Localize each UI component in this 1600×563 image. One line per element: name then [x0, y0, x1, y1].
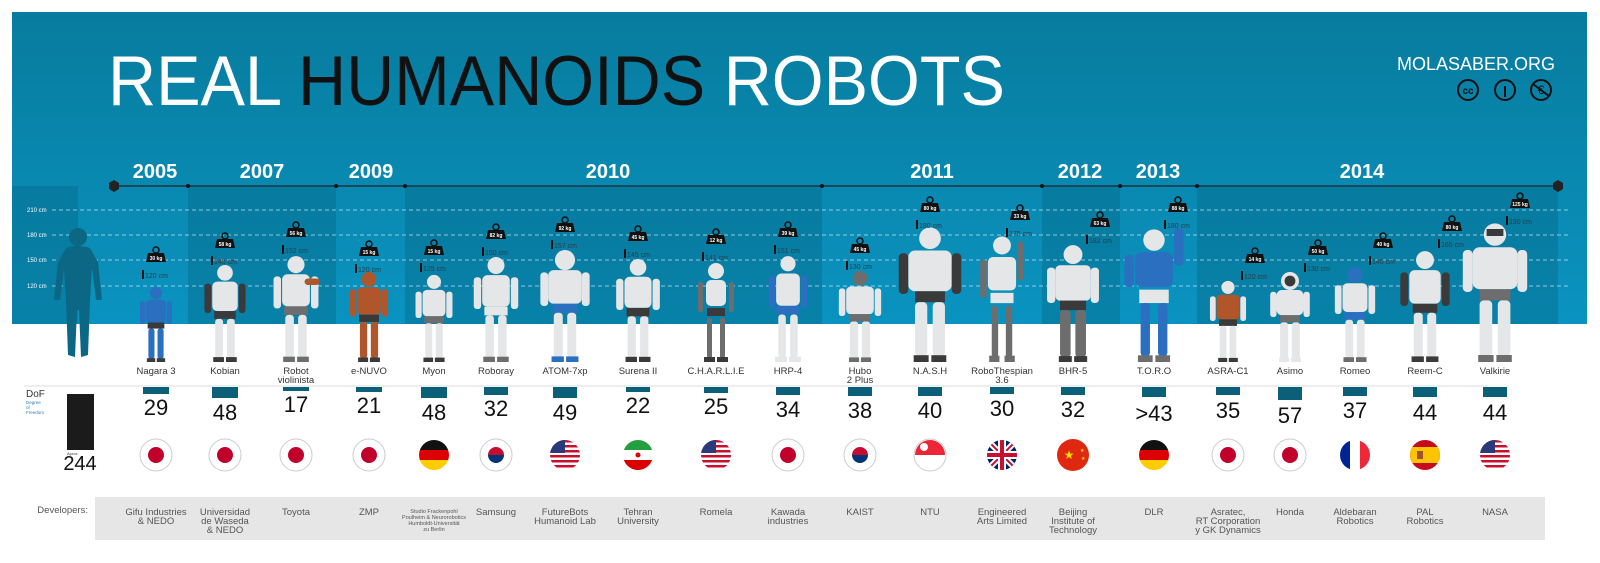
developer names: Samsung: [476, 507, 516, 518]
DoF numbers: 48: [213, 400, 237, 425]
human silhouette: [54, 228, 102, 357]
height scale: 210 cm: [27, 208, 47, 214]
flag: France: [1340, 440, 1370, 470]
developer names: Studio Frackenpohl: [410, 509, 458, 515]
robot: Kobian: [204, 265, 246, 362]
DoF numbers: 22: [626, 393, 650, 418]
robot: Robot violinista: [274, 256, 320, 362]
robot names: violinista: [278, 375, 315, 386]
weight and height markers: 165 cm: [1441, 242, 1464, 249]
flag: Japan: [353, 439, 385, 471]
developer names: FutureBots: [542, 507, 588, 518]
robot: Reem-C: [1400, 251, 1450, 362]
weight and height markers: 125 kg: [1512, 202, 1528, 208]
flag: Korea: [480, 439, 512, 471]
DoF numbers: >43: [1135, 401, 1173, 426]
weight and height markers: 15 kg: [363, 250, 375, 256]
DoF numbers: 40: [918, 398, 942, 423]
year labels: [133, 161, 1385, 183]
developer names: Toyota: [282, 507, 311, 518]
weight and height markers: 157 cm: [554, 243, 577, 250]
DoF numbers: 21: [357, 393, 381, 418]
DoF numbers: 32: [484, 396, 508, 421]
robot names: e-NUVO: [351, 366, 387, 377]
weight and height markers: 180 cm: [919, 223, 942, 230]
weight and height markers: 151 cm: [777, 248, 800, 255]
flag: USA: [550, 440, 580, 468]
flag: USA: [701, 440, 731, 468]
DoF numbers: [144, 392, 1507, 428]
weight and height markers: 14 kg: [1249, 257, 1261, 263]
weight and height markers: 45 kg: [632, 235, 644, 241]
license icons: [1458, 80, 1551, 100]
flag: Germany: [419, 440, 449, 470]
DoF numbers: 17: [284, 392, 308, 417]
year labels: 2012: [1058, 161, 1102, 183]
robot names: Kobian: [210, 366, 240, 377]
height scale: 120 cm: [27, 284, 47, 290]
robot names: [136, 366, 1510, 386]
weight and height markers: 152 cm: [285, 248, 308, 255]
flag: China: ★: [1064, 448, 1074, 462]
year labels: 2009: [349, 161, 393, 183]
weight and height markers: 45 kg: [854, 247, 866, 253]
developers band: [95, 497, 1545, 540]
year labels: 2007: [240, 161, 284, 183]
height scale: [27, 208, 1568, 290]
developer names: Humboldt-Universität: [408, 521, 460, 527]
developer names: Humanoid Lab: [534, 516, 596, 527]
site name: MOLASABER.ORG: [1397, 54, 1555, 74]
robot names: Hubo: [849, 366, 871, 377]
developer names: de Waseda: [201, 516, 250, 527]
developer names: Universidad: [200, 507, 250, 518]
human DoF bar: 244: [63, 453, 97, 475]
license icons: €: [1538, 83, 1545, 97]
developer names: Tehran: [623, 507, 653, 518]
robot names: BHR-5: [1059, 366, 1087, 377]
robot names: ATOM-7xp: [542, 366, 588, 377]
robot names: Myon: [422, 366, 446, 377]
robot: ATOM-7xp: [540, 250, 590, 362]
DoF legend: Degree: [26, 400, 41, 405]
weight and height markers: 150 cm: [485, 250, 508, 257]
developer names: Institute of: [1051, 516, 1095, 527]
developer names: Technology: [1049, 525, 1097, 536]
developer names: RT Corporation: [1196, 516, 1260, 527]
flag: USA: [1480, 440, 1510, 468]
robot: Roboray: [474, 257, 518, 362]
flag: Iran: [624, 440, 652, 470]
robot names: RoboThespian: [971, 366, 1033, 377]
robots: [140, 223, 1527, 362]
robot: ASRA-C1: [1210, 281, 1246, 362]
robot names: Robot: [283, 366, 309, 377]
weight and height markers: 180 cm: [1167, 223, 1190, 230]
developer names: Honda: [1276, 507, 1305, 518]
weight and height markers: 140 cm: [1372, 259, 1395, 266]
license icons: cc: [1462, 86, 1474, 97]
DoF numbers: 25: [704, 394, 728, 419]
DoF numbers: 49: [553, 400, 577, 425]
DoF numbers: 48: [422, 400, 446, 425]
human DoF bar: [63, 394, 97, 475]
DoF numbers: 35: [1216, 398, 1240, 423]
developer names: ZMP: [359, 507, 379, 518]
weight and height markers: 82 kg: [490, 233, 502, 239]
DoF legend: DoF: [26, 389, 45, 400]
flag: Japan: [1212, 439, 1244, 471]
weight and height markers: 88 kg: [1172, 206, 1184, 212]
weight and height markers: 50 kg: [1312, 249, 1324, 255]
DoF legend: of: [26, 405, 31, 410]
DoF numbers: 44: [1483, 400, 1507, 425]
flag: China: ★: [1080, 448, 1085, 454]
flag: Japan: [1274, 439, 1306, 471]
developer names: Aldebaran: [1333, 507, 1377, 518]
DoF numbers: 30: [990, 396, 1014, 421]
weight and height markers: 125 cm: [423, 266, 446, 273]
developer names: NASA: [1482, 507, 1509, 518]
weight and height markers: 63 kg: [1094, 221, 1106, 227]
DoF numbers: 37: [1343, 398, 1367, 423]
timeline: [109, 180, 1563, 192]
robot names: Roboray: [478, 366, 514, 377]
developer names: & NEDO: [207, 525, 243, 536]
robot: C.H.A.R.L.I.E: [698, 263, 734, 362]
DoF numbers: 44: [1413, 400, 1437, 425]
robot: Surena II: [616, 259, 660, 362]
developer names: Kawada: [771, 507, 805, 518]
weight and height markers: 130 cm: [849, 264, 872, 271]
weight and height markers: 120 cm: [358, 267, 381, 274]
developers label: Developers:: [37, 505, 88, 516]
robot: RoboThespian 3.6: [980, 237, 1024, 362]
weight and height markers: 92 kg: [559, 226, 571, 232]
weight and height markers: 56 kg: [290, 231, 302, 237]
robot: Nagara 3: [140, 287, 172, 362]
flag: Japan: [209, 439, 241, 471]
robot: Asimo: [1270, 272, 1310, 362]
robot names: Reem-C: [1407, 366, 1443, 377]
robot: T.O.R.O: [1125, 228, 1183, 362]
title: REAL HUMANOIDS ROBOTS: [108, 42, 1005, 121]
developer names: Poulheim & Neurorobotics: [402, 515, 466, 521]
DoF bars: [143, 387, 1507, 400]
developer names: [125, 507, 1509, 536]
developer names: y GK Dynamics: [1195, 525, 1261, 536]
developer names: Robotics: [1407, 516, 1444, 527]
developer names: Asratec,: [1211, 507, 1245, 518]
weight and height markers: 120 cm: [1244, 274, 1267, 281]
weight and height markers: 175 cm: [1009, 231, 1032, 238]
robot names: 3.6: [995, 375, 1009, 386]
developer names: Beijing: [1059, 507, 1087, 518]
flag: Korea: [844, 439, 876, 471]
year labels: 2014: [1340, 161, 1385, 183]
DoF numbers: 32: [1061, 397, 1085, 422]
developer names: Arts Limited: [977, 516, 1027, 527]
robot names: Valkirie: [1480, 366, 1510, 377]
year labels: 2005: [133, 161, 177, 183]
developer names: NTU: [920, 507, 940, 518]
year labels: 2011: [910, 161, 954, 183]
weight and height markers: 80 kg: [924, 206, 936, 212]
robot names: C.H.A.R.L.I.E: [687, 366, 745, 377]
flag: Spain: [1410, 440, 1440, 470]
weight and height markers: 40 kg: [1377, 242, 1389, 248]
weight and height markers: 15 kg: [428, 249, 440, 255]
year labels: 2010: [586, 161, 630, 183]
year labels: 2013: [1136, 161, 1180, 183]
weight and height markers: 141 cm: [705, 255, 728, 262]
developer names: Engineered: [978, 507, 1026, 518]
weight and height markers: 39 kg: [782, 231, 794, 237]
weight and height markers: 140 cm: [214, 259, 237, 266]
flag: Japan: [140, 439, 172, 471]
height scale: 150 cm: [27, 258, 47, 264]
flag: Japan: [772, 439, 804, 471]
robot names: ASRA-C1: [1207, 366, 1249, 377]
developer names: Romela: [700, 507, 733, 518]
developer names: DLR: [1144, 507, 1164, 518]
weight and height markers: 145 cm: [627, 252, 650, 259]
flag: Japan: [280, 439, 312, 471]
robot names: T.O.R.O: [1137, 366, 1171, 377]
flag: UK: [987, 440, 1017, 470]
DoF numbers: 57: [1278, 403, 1302, 428]
developer names: Gifu Industries: [125, 507, 187, 518]
robot names: Asimo: [1277, 366, 1303, 377]
robot: Romeo: [1335, 267, 1375, 362]
robot: N.A.S.H: [899, 227, 961, 362]
human DoF bar: Aprox.: [67, 451, 79, 456]
developer names: & NEDO: [138, 516, 174, 527]
DoF legend: Freedom: [26, 410, 44, 415]
robot names: Romeo: [1340, 366, 1370, 377]
robot: Hubo 2 Plus: [839, 271, 881, 362]
flag: Germany: [1139, 440, 1169, 470]
weight and height markers: 190 cm: [1509, 219, 1532, 226]
weight and height markers: 58 kg: [219, 242, 231, 248]
DoF legend: [26, 389, 45, 415]
era panels: [12, 186, 1558, 324]
developer names: Robotics: [1337, 516, 1374, 527]
robot: HRP-4: [769, 256, 807, 362]
weight and height markers: 120 cm: [145, 273, 168, 280]
weight and height markers: 33 kg: [1014, 214, 1026, 220]
robot: Myon: [416, 275, 452, 362]
weight and height markers: 182 cm: [1089, 238, 1112, 245]
weight and height markers: 80 kg: [1446, 225, 1458, 231]
developer names: University: [617, 516, 659, 527]
DoF numbers: 34: [776, 397, 800, 422]
developer names: PAL: [1416, 507, 1434, 518]
weight and height markers: 30 kg: [150, 256, 162, 262]
flag: China: [1057, 439, 1089, 471]
flags: [140, 439, 1511, 471]
robot names: HRP-4: [774, 366, 802, 377]
height scale: 180 cm: [27, 233, 47, 239]
developer names: KAIST: [846, 507, 874, 518]
DoF numbers: 29: [144, 395, 168, 420]
developer names: zu Berlin: [423, 527, 445, 533]
blue header band: [12, 12, 1587, 324]
robot: Valkirie: [1463, 223, 1527, 362]
robot names: Nagara 3: [136, 366, 176, 377]
robot: BHR-5: [1047, 245, 1099, 362]
weight and height markers: 130 cm: [1307, 266, 1330, 273]
DoF numbers: 38: [848, 398, 872, 423]
weight and height markers: 12 kg: [710, 238, 722, 244]
robot names: N.A.S.H: [913, 366, 947, 377]
flag: China: ★: [1081, 456, 1086, 462]
developer names: industries: [768, 516, 809, 527]
robot names: 2 Plus: [847, 375, 873, 386]
robot: e-NUVO: [350, 272, 388, 362]
weight and height markers: [142, 193, 1532, 281]
robot names: Surena II: [619, 366, 657, 377]
flag: Singapore: [914, 439, 946, 471]
